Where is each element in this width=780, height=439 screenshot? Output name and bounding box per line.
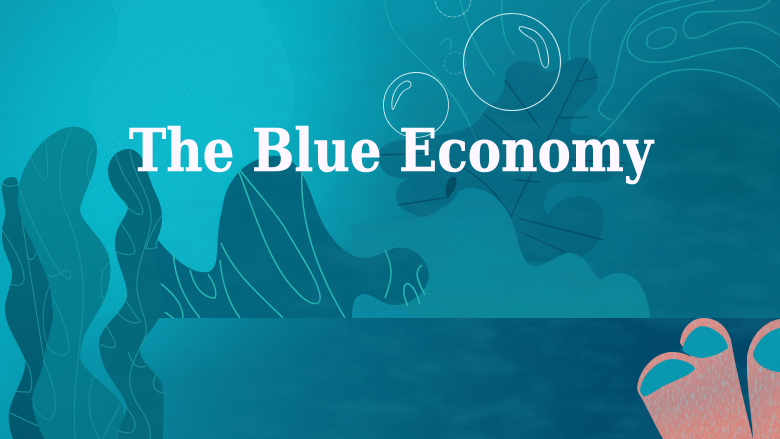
dark coral blob with lines xyxy=(150,156,429,318)
title: The Blue Economy xyxy=(129,116,654,185)
back seaweed xyxy=(2,177,60,439)
lower light blob xyxy=(352,188,650,318)
light upper blob xyxy=(89,0,294,272)
contour lines top right xyxy=(385,0,780,150)
bubbles xyxy=(384,0,560,138)
leaf silhouette behind title xyxy=(379,57,625,262)
shell: middle tube xyxy=(680,318,753,439)
shell: right tube xyxy=(747,319,780,439)
front seaweed xyxy=(18,127,124,439)
coral tube shells xyxy=(637,318,780,439)
shell: left tube xyxy=(637,352,730,439)
lower dark water band xyxy=(0,318,780,439)
right seaweed xyxy=(99,149,163,439)
mottled brush texture xyxy=(224,0,780,439)
